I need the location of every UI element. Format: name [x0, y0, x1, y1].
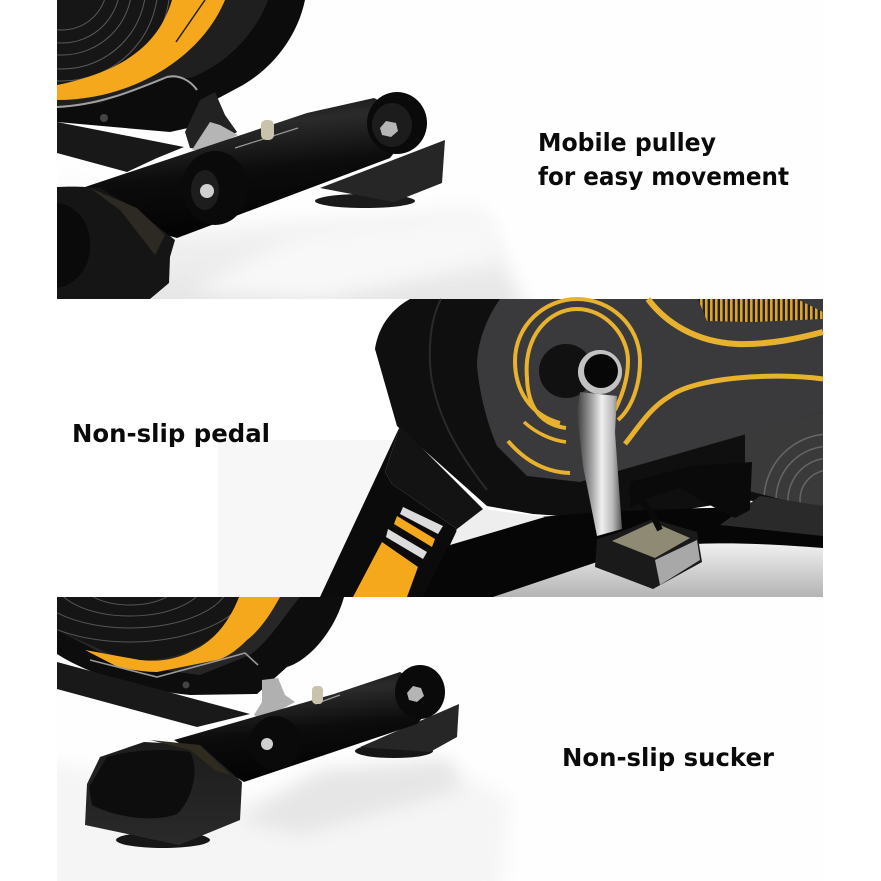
- mounting bracket: [254, 678, 295, 720]
- flywheel housing: [57, 0, 305, 132]
- yellow swoosh decorations: [508, 299, 823, 473]
- mounting bracket: [185, 92, 237, 150]
- rubber foot: [320, 140, 445, 202]
- panel: non-slip pedal: [57, 299, 881, 597]
- panel: non-slip sucker: [57, 597, 774, 881]
- rear frame bar: [57, 662, 250, 727]
- end cap: [395, 665, 445, 719]
- tube collar: [250, 716, 300, 770]
- crank arm: [577, 392, 622, 536]
- bottom frame arch: [405, 506, 823, 597]
- rear frame bar: [57, 122, 184, 172]
- foot shadow: [315, 194, 415, 208]
- yellow vent grille: [698, 299, 823, 322]
- rubber foot shadow: [355, 744, 433, 758]
- crossbar tube: [174, 672, 442, 782]
- pedal strap: [630, 462, 752, 518]
- caption: non-slip pedal: Non-slip pedal: [72, 419, 270, 448]
- front foot block: [57, 187, 175, 299]
- seat post stripe leg: [320, 426, 483, 597]
- bolt: [261, 120, 274, 140]
- crank hub: [539, 344, 622, 398]
- yellow band: [85, 597, 280, 672]
- front suction foot: [116, 832, 210, 848]
- flywheel housing: [57, 597, 344, 695]
- flywheel rings: [57, 597, 238, 660]
- front foot: [85, 740, 242, 845]
- caption: non-slip sucker: Non-slip sucker: [562, 743, 775, 772]
- rubber foot rear: [360, 704, 459, 752]
- pedal: [595, 490, 702, 589]
- flywheel rings: [57, 0, 172, 84]
- bike body: [375, 299, 823, 520]
- yellow band: [57, 0, 225, 100]
- flywheel disc lower right: [745, 412, 823, 506]
- caption: mobile pulley: Mobile pulley: [538, 128, 716, 157]
- crank ring: [515, 299, 640, 442]
- crank boss: [578, 350, 622, 394]
- tube collar: [182, 151, 248, 225]
- end cap pulley: [367, 92, 427, 154]
- caption: mobile pulley: [538, 128, 789, 191]
- crossbar tube: [85, 98, 420, 238]
- bolt: [312, 686, 323, 704]
- caption: mobile pulley: for easy movement: [538, 162, 789, 191]
- panel: mobile pulley: [57, 0, 788, 299]
